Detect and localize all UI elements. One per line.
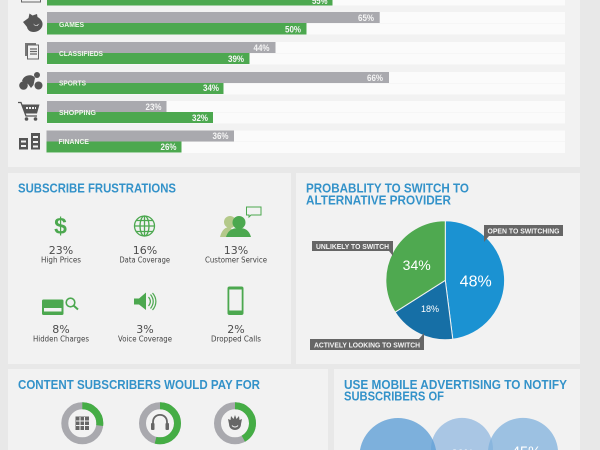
callout: unlikely to switch [312,241,393,256]
row: games: 65% [358,13,374,23]
stat: voice coverage [118,323,172,344]
panel: usage bar chart [8,0,580,167]
row: finance: FINANCE [58,137,89,146]
stat: data coverage: 16% [133,244,157,257]
venn circles [360,418,558,450]
icon: hidden charges card [42,298,78,315]
stat: high prices [41,244,81,264]
row: sports: 34% [203,83,219,93]
row: classifieds: 39% [228,54,244,64]
pie value: 18%: 18% [421,304,439,314]
row: finance: 36% [212,131,228,141]
panel: subscribe frustrations [8,173,291,364]
stat: hidden charges: Hidden Charges [33,334,89,344]
row: classifieds: CLASSIFIEDS [59,49,103,58]
stat: high prices: 23% [49,244,73,257]
callout: actively looking to switch: ACTIVELY LOOKING TO SWITCH [314,341,420,350]
row: finance [19,130,565,153]
callout: unlikely to switch: UNLIKELY TO SWITCH [316,242,389,251]
stat: customer service: Customer Service [205,256,267,264]
row: games: GAMES [59,20,84,29]
heading: probability to switch: PROBABLITY TO SWITCH TO [306,181,469,195]
row: sports: 66% [367,73,383,83]
row: shopping [18,101,565,124]
icon: dollar: $ [54,213,67,239]
ring: music headphones [142,406,178,441]
row: top partial category [22,0,565,6]
stat: dropped calls: Dropped Calls [211,334,261,344]
icon: globe [134,216,154,236]
panel: probability to switch [296,173,580,364]
heading: mobile advertising: USE MOBILE ADVERTISING TO NOTIFY [344,378,568,392]
callout: open to switching [484,225,563,242]
stat: dropped calls: 2% [227,323,245,336]
heading: mobile advertising [344,378,568,404]
stat: data coverage: Data Coverage [120,256,170,264]
stat: data coverage [120,244,170,264]
stat: voice coverage: 3% [136,323,154,336]
stat: dropped calls [211,323,261,344]
icon: smartphone [228,286,244,315]
callout: open to switching: OPEN TO SWITCHING [488,226,560,235]
icon: customer service people [220,207,261,237]
heading: probability to switch [306,181,469,207]
pie chart [386,221,505,340]
stat: voice coverage: Voice Coverage [118,334,172,344]
row: shopping: 23% [146,102,162,112]
row: finance: 26% [160,142,176,152]
row: classifieds [25,42,565,64]
stat: customer service: 13% [224,244,248,257]
row: games [23,12,565,34]
heading: probability to switch: ALTERNATIVE PROVIDER [306,193,451,207]
ring: apps grid [65,406,100,441]
row: sports [19,72,565,94]
stat: hidden charges [33,323,89,344]
row: shopping: 32% [192,113,208,123]
ring: games mascot [218,406,252,441]
panel: content subscribers would pay for [8,369,328,450]
pie value: 48%: 48% [460,273,492,290]
icon: speaker [134,292,156,310]
pie value: 34%: 34% [403,257,431,273]
heading: mobile advertising: SUBSCRIBERS OF [344,390,444,404]
row: games: 50% [285,24,301,34]
row: classifieds: 44% [254,43,270,53]
row: shopping: SHOPPING [59,108,96,117]
stat: customer service [205,244,267,264]
stat: high prices: High Prices [41,256,81,264]
stat: hidden charges: 8% [52,323,70,336]
panel: mobile advertising notifications [334,369,580,450]
heading: subscribe frustrations: SUBSCRIBE FRUSTRATIONS [18,182,176,196]
heading: content subscribers: CONTENT SUBSCRIBERS WOULD PAY FOR [18,378,260,392]
row: sports: SPORTS [59,78,86,87]
callout: actively looking to switch [310,333,424,350]
